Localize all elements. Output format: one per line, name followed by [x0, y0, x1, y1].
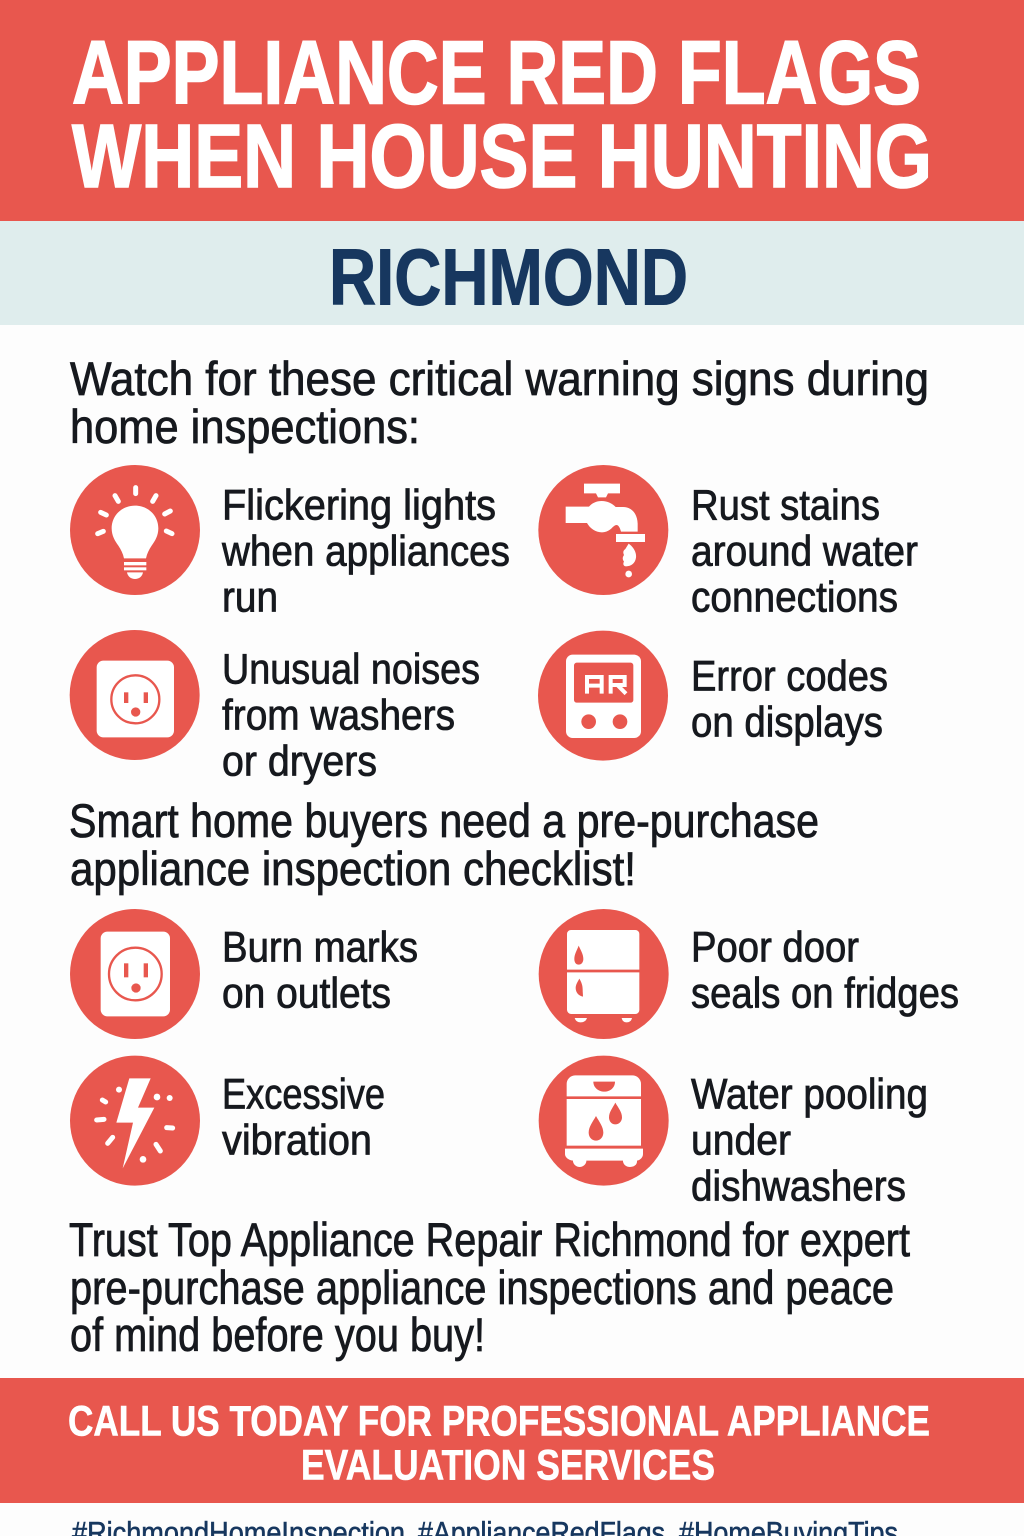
label: flickering lights: when appliances — [221, 528, 510, 576]
label: flickering lights: Flickering lights — [222, 482, 496, 530]
label: unusual noises — [222, 646, 480, 786]
mid text: Smart home buyers need a pre-purchase — [69, 794, 819, 847]
item: door seals — [539, 909, 959, 1039]
label: flickering lights — [221, 482, 510, 622]
label: burn marks — [222, 924, 418, 1018]
item: flickering lights — [70, 465, 510, 622]
label: door seals: Poor door — [691, 924, 859, 972]
icon: dripping faucet — [538, 465, 668, 595]
call to action banner: EVALUATION SERVICES — [301, 1442, 715, 1490]
closing text: pre-purchase appliance inspections and peace — [70, 1261, 894, 1314]
item: error codes — [538, 631, 888, 761]
closing text: of mind before you buy! — [70, 1308, 485, 1361]
intro text — [70, 352, 929, 453]
icon: lightning bolt — [70, 1056, 200, 1186]
call to action banner — [0, 1378, 1024, 1503]
label: unusual noises: or dryers — [222, 738, 377, 786]
label: rust stains — [691, 482, 918, 622]
hashtags — [72, 1515, 898, 1536]
title — [72, 24, 932, 207]
icon: fridge — [539, 909, 669, 1039]
label: excessive vibration — [222, 1070, 385, 1164]
label: excessive vibration: vibration — [222, 1116, 372, 1164]
label: door seals: seals on fridges — [691, 970, 959, 1018]
icon: dishwasher — [539, 1056, 669, 1186]
label: water pooling — [691, 1070, 928, 1210]
intro text: home inspections: — [70, 400, 420, 453]
label: rust stains: around water — [691, 528, 918, 576]
label: rust stains: connections — [691, 574, 898, 622]
item: unusual noises — [70, 630, 480, 786]
mid text: appliance inspection checklist! — [70, 842, 636, 895]
label: burn marks: on outlets — [222, 970, 391, 1018]
label: excessive vibration: Excessive — [222, 1070, 385, 1118]
header banner — [0, 0, 1024, 221]
label: burn marks: Burn marks — [222, 924, 418, 972]
label: unusual noises: Unusual noises — [222, 646, 480, 694]
icon: outlet tall — [70, 909, 200, 1039]
label: door seals — [691, 924, 959, 1018]
item: burn marks — [70, 909, 418, 1039]
label: error codes: Error codes — [691, 652, 888, 700]
item: water pooling — [539, 1056, 928, 1210]
label: water pooling: Water pooling — [691, 1070, 928, 1118]
location band: RICHMOND — [329, 232, 688, 322]
icon: display panel — [538, 631, 668, 761]
label: water pooling: dishwashers — [691, 1162, 906, 1210]
label: error codes: on displays — [691, 698, 883, 746]
intro text: Watch for these critical warning signs during — [70, 352, 929, 405]
label: rust stains: Rust stains — [691, 482, 880, 530]
icon: light bulb — [70, 465, 200, 595]
mid text — [69, 794, 819, 895]
label: water pooling: under — [691, 1116, 791, 1164]
closing text — [69, 1213, 910, 1361]
item: excessive vibration — [70, 1056, 385, 1186]
location band — [0, 221, 1024, 325]
icon: wall outlet square — [70, 630, 200, 760]
item: rust stains — [538, 465, 918, 622]
label: error codes — [691, 652, 888, 746]
label: unusual noises: from washers — [222, 692, 455, 740]
label: flickering lights: run — [222, 574, 278, 622]
